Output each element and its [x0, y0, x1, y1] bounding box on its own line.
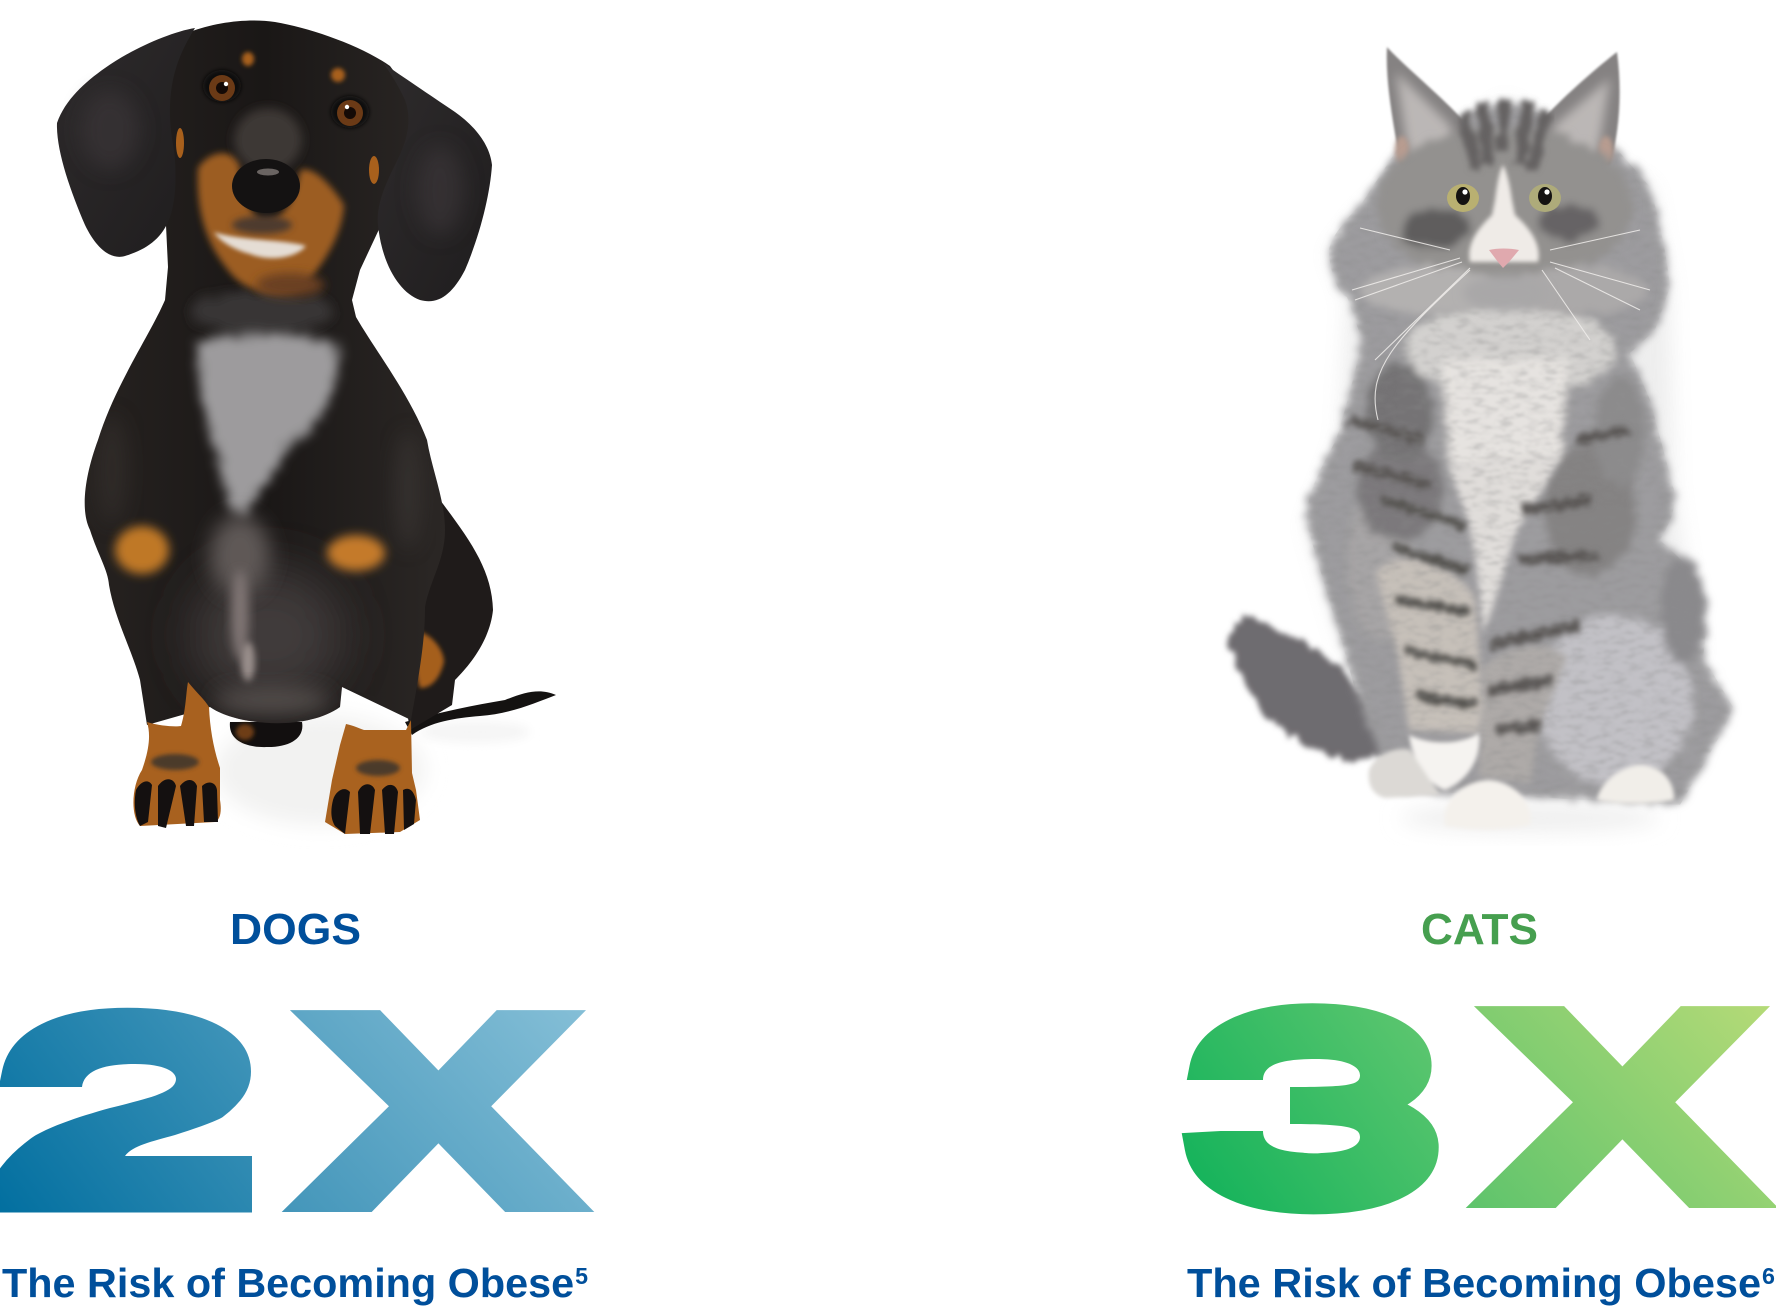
statistic: 3X: 3 — [1202, 968, 1427, 1249]
label: risk of becoming obese, dogs: 5 — [575, 1263, 588, 1289]
heading: cats: CATS — [1421, 905, 1538, 954]
statistic: 3X — [1170, 955, 1764, 1260]
label: risk of becoming obese, cats: 6 — [1762, 1263, 1775, 1289]
label: risk of becoming obese, dogs: The Risk of Becoming Obese — [2, 1260, 569, 1306]
statistic: 2X: 2 — [13, 974, 244, 1249]
icon: front legs and paws — [133, 682, 420, 834]
icon: cat ears — [1387, 47, 1620, 180]
photo: dachshund dog — [57, 20, 556, 834]
statistic: 3X: X — [1482, 955, 1764, 1260]
label: risk of becoming obese, cats: The Risk of Becoming Obese — [1187, 1260, 1754, 1306]
panel: dogs — [0, 20, 588, 1306]
heading: dogs: DOGS — [230, 905, 361, 954]
panel: cats — [1170, 47, 1775, 1306]
photo: tabby cat — [1226, 47, 1740, 832]
statistic: 2X — [0, 959, 580, 1264]
statistic: 2X: X — [298, 959, 580, 1264]
